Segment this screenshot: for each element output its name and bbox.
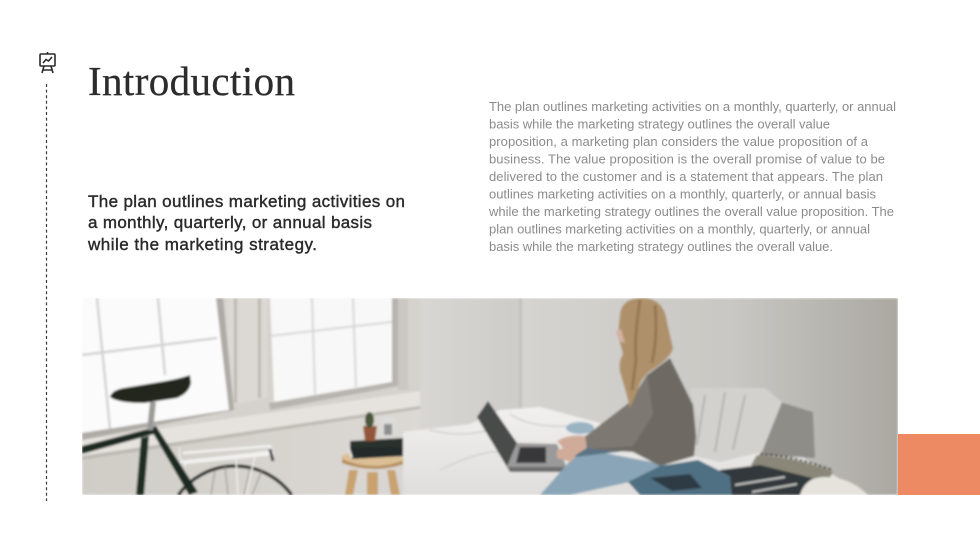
body paragraph: proposition, a marketing plan considers the value proposition of a	[489, 134, 869, 149]
body paragraph: The plan outlines marketing activities on a monthly, quarterly, or annual	[489, 99, 896, 114]
window frames	[409, 300, 414, 390]
laptop	[477, 401, 567, 472]
title: Introduction	[88, 58, 295, 104]
pillow behind woman	[690, 388, 782, 462]
body paragraph: basis while the marketing strategy outlines the overall value	[489, 116, 830, 132]
orange accent block	[898, 434, 980, 495]
body paragraph: basis while the marketing strategy outlines the overall value.	[489, 239, 833, 254]
bed and pillows	[403, 407, 868, 495]
left window panes	[82, 298, 234, 440]
icon: presentation board with chart	[40, 52, 55, 73]
blankets and denim	[628, 454, 868, 495]
bicycle wheel and rack	[178, 446, 292, 495]
bicycle frame and seat	[82, 375, 198, 495]
subheading text block: a monthly, quarterly, or annual basis	[88, 213, 372, 232]
subheading text block	[87, 192, 405, 254]
woman: hair, sweater, hands and jeans	[540, 298, 698, 495]
subheading text block: The plan outlines marketing activities on	[88, 192, 405, 211]
body paragraph: business. The value proposition is the overall promise of value to be	[489, 152, 885, 166]
dashed vertical timeline	[46, 84, 48, 501]
body paragraph: delivered to the customer and is a statement that appears. The plan	[489, 169, 883, 184]
body paragraph: outlines marketing activities on a monthly, quarterly, or annual basis	[489, 186, 876, 202]
window sill and lower wall	[82, 391, 420, 495]
photo: woman with laptop on bed beside windows and bicycle	[82, 298, 898, 495]
body paragraph	[488, 99, 896, 254]
right window panes	[269, 298, 408, 410]
body paragraph: plan outlines marketing activities on a monthly, quarterly, or annual	[489, 222, 870, 236]
stool with books, cactus and mug	[342, 412, 408, 495]
pillow shadow on wall	[760, 402, 815, 458]
body paragraph: while the marketing strategy outlines the overall value proposition. The	[488, 204, 894, 219]
central window column	[234, 298, 261, 403]
subheading text block: while the marketing strategy.	[87, 235, 317, 254]
